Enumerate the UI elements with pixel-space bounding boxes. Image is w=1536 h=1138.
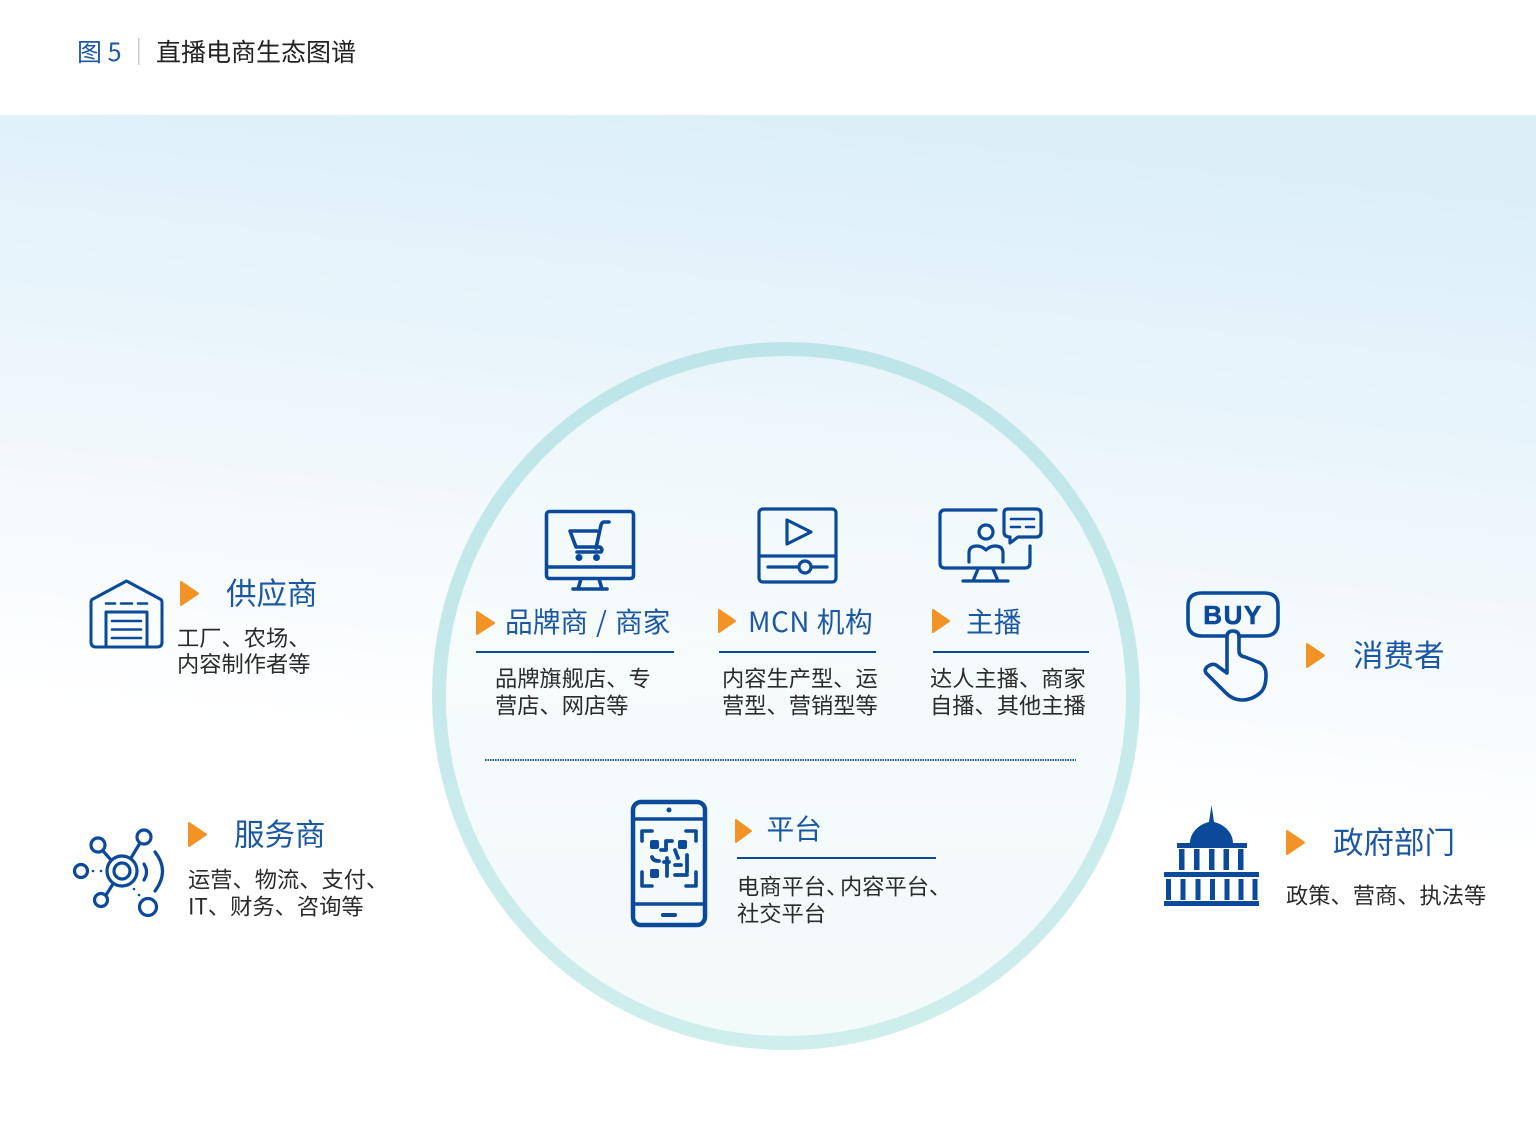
heading: streamer bbox=[933, 600, 1089, 653]
icon: government building bbox=[1164, 805, 1259, 906]
icon: warehouse bbox=[91, 581, 162, 647]
heading: service provider bbox=[189, 810, 326, 854]
heading: brand merchants: / bbox=[596, 600, 607, 640]
text: brand merchants description: 营店、网店等 bbox=[495, 688, 628, 720]
text: government description: 政策、营商、执法等 bbox=[1286, 878, 1486, 910]
heading: consumer bbox=[1307, 632, 1444, 676]
icon: service network bbox=[74, 830, 162, 916]
heading: supplier: 供应商 bbox=[226, 570, 318, 614]
text: streamer description: 自播、其他主播 bbox=[930, 688, 1086, 720]
heading: MCN: MCN 机构 bbox=[748, 600, 873, 640]
text: supplier description: 工厂、农场、 bbox=[177, 621, 310, 653]
icon: streamer on screen bbox=[940, 509, 1041, 581]
icon: buy button with hand: BUY bbox=[1203, 600, 1263, 630]
text: service provider description: IT、财务、咨询等 bbox=[188, 890, 364, 922]
icon: video player bbox=[759, 509, 836, 582]
divider: dotted line bbox=[485, 759, 1076, 761]
heading: government departments: 政府部门 bbox=[1333, 818, 1455, 862]
text: platform description: 社交平台 bbox=[737, 896, 826, 928]
title: 直播电商生态图谱 bbox=[156, 33, 356, 69]
text: brand merchants description: 品牌旗舰店、专 bbox=[495, 662, 651, 694]
text: streamer description: 达人主播、商家 bbox=[930, 662, 1086, 694]
title: 图 5 bbox=[77, 33, 121, 69]
heading: brand merchants: 品牌商 bbox=[505, 600, 588, 640]
text: MCN description: 营型、营销型等 bbox=[722, 688, 878, 720]
text: MCN description: 内容生产型、运 bbox=[722, 662, 878, 694]
icon: shopping cart monitor bbox=[546, 512, 634, 589]
icon: buy button with hand bbox=[1188, 593, 1278, 700]
heading: service provider: 服务商 bbox=[234, 810, 326, 854]
heading: streamer: 主播 bbox=[966, 600, 1022, 640]
heading: supplier bbox=[181, 570, 318, 614]
heading: platform: 平台 bbox=[766, 807, 822, 847]
heading: platform bbox=[736, 807, 936, 859]
heading: brand merchants bbox=[476, 600, 674, 653]
heading: brand merchants: 商家 bbox=[615, 600, 670, 640]
text: platform description: 内容平台、 bbox=[840, 870, 951, 902]
text: service provider description: 运营、物流、支付、 bbox=[188, 862, 388, 894]
heading: MCN bbox=[719, 600, 876, 653]
panel: central ecosystem circle bbox=[439, 349, 1133, 1043]
text: supplier description: 内容制作者等 bbox=[177, 647, 310, 679]
icon: phone with QR code bbox=[633, 802, 705, 925]
text: platform description: 电商平台、 bbox=[737, 870, 848, 902]
heading: consumer: 消费者 bbox=[1353, 632, 1444, 676]
